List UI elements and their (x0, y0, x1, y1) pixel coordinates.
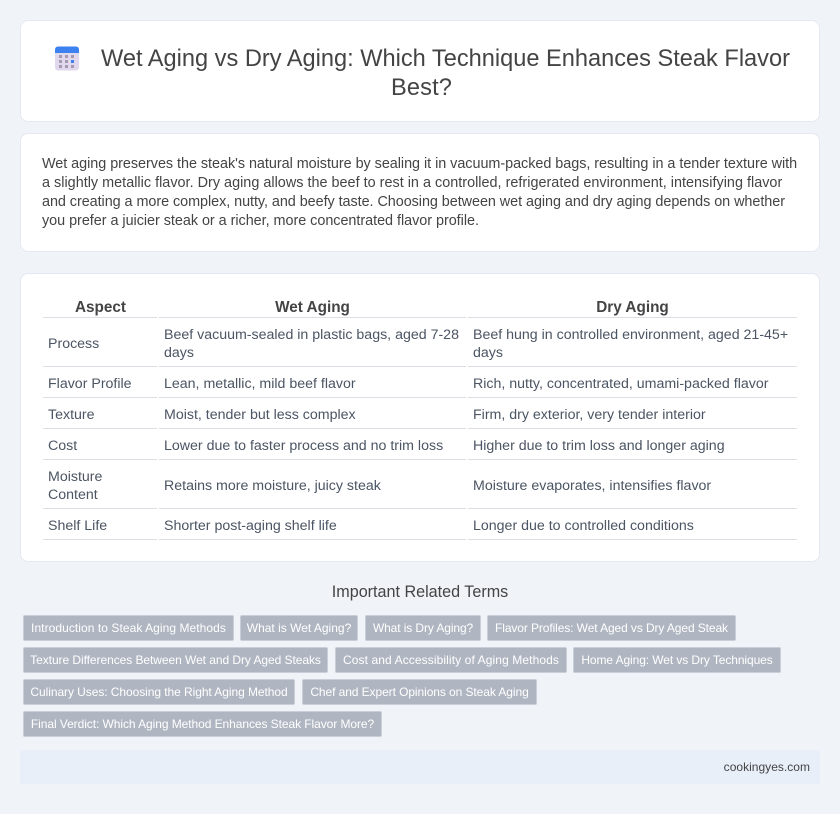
text: Wet aging preserves the steak's natural moisture by sealing it in vacuum-packed bags, resulting in a tender texture with (42, 156, 797, 172)
row: moisture content: Moisture evaporates, intensifies flavor (473, 478, 711, 494)
table header: Aspect (75, 299, 126, 316)
row: cost (48, 438, 725, 454)
related term tags: Flavor Profiles: Wet Aged vs Dry Aged Steak (495, 621, 728, 635)
row: moisture content (48, 469, 711, 503)
row: flavor profile (48, 376, 768, 392)
row: shelf life (48, 518, 694, 534)
row: texture: Firm, dry exterior, very tender interior (473, 407, 706, 423)
row: moisture content: Retains more moisture, juicy steak (164, 478, 381, 494)
related term tags: Introduction to Steak Aging Methods (31, 621, 226, 635)
row: moisture content: Moisture (48, 469, 102, 485)
table header: Wet Aging (275, 299, 350, 316)
row: flavor profile: Rich, nutty, concentrated, umami-packed flavor (473, 376, 768, 392)
row: texture (48, 407, 706, 423)
text: you prefer a juicier steak or a richer, more concentrated flavor profile. (42, 213, 479, 229)
related term tags: Culinary Uses: Choosing the Right Aging Method (30, 685, 288, 699)
row: process (48, 327, 788, 361)
related term tags: Chef and Expert Opinions on Steak Aging (310, 685, 529, 699)
related term tags: Final Verdict: Which Aging Method Enhances Steak Flavor More? (31, 717, 374, 731)
table (43, 299, 797, 540)
text: and creating a more complex, nutty, and beefy taste. Choosing between wet aging and dry aging depends on whether (42, 194, 785, 210)
row: process: Beef vacuum-sealed in plastic bags, aged 7-28 (164, 327, 459, 343)
related term tags: Texture Differences Between Wet and Dry Aged Steaks (30, 653, 321, 667)
row: flavor profile: Flavor Profile (48, 376, 132, 392)
row: texture: Moist, tender but less complex (164, 407, 356, 423)
icon: calendar (55, 46, 79, 70)
related term tags (23, 615, 781, 737)
comparison table panel (20, 273, 820, 562)
related terms heading: Important Related Terms (332, 583, 508, 601)
related term tags: What is Wet Aging? (247, 621, 351, 635)
row: shelf life: Longer due to controlled conditions (473, 518, 694, 534)
row: shelf life: Shelf Life (48, 518, 107, 534)
row: texture: Texture (48, 407, 95, 423)
header panel (20, 20, 820, 122)
table header (75, 299, 669, 316)
footer bar (20, 750, 820, 784)
related term tags: Cost and Accessibility of Aging Methods (343, 653, 559, 667)
related term tags: Home Aging: Wet vs Dry Techniques (581, 653, 773, 667)
row: cost: Cost (48, 438, 77, 454)
row: cost: Higher due to trim loss and longer aging (473, 438, 725, 454)
row: process: Process (48, 336, 99, 352)
related term tags: What is Dry Aging? (373, 621, 473, 635)
table header: Dry Aging (596, 299, 669, 316)
row: moisture content: Content (48, 487, 98, 503)
intro panel (20, 133, 820, 252)
footer site name: cookingyes.com (724, 760, 810, 774)
text: Wet Aging vs Dry Aging: Which Technique Enhances Steak Flavor (101, 46, 790, 72)
row: process: days (473, 345, 503, 361)
row: shelf life: Shorter post-aging shelf life (164, 518, 337, 534)
row: flavor profile: Lean, metallic, mild beef flavor (164, 376, 356, 392)
row: process: days (164, 345, 194, 361)
intro text (42, 156, 797, 229)
text: a slightly metallic flavor. Dry aging allows the beef to rest in a controlled, refrigerated environment, intensifying flavor (42, 175, 782, 191)
row: process: Beef hung in controlled environment, aged 21-45+ (473, 327, 788, 343)
row: cost: Lower due to faster process and no trim loss (164, 438, 443, 454)
text: Best? (391, 75, 452, 101)
title (101, 46, 790, 101)
